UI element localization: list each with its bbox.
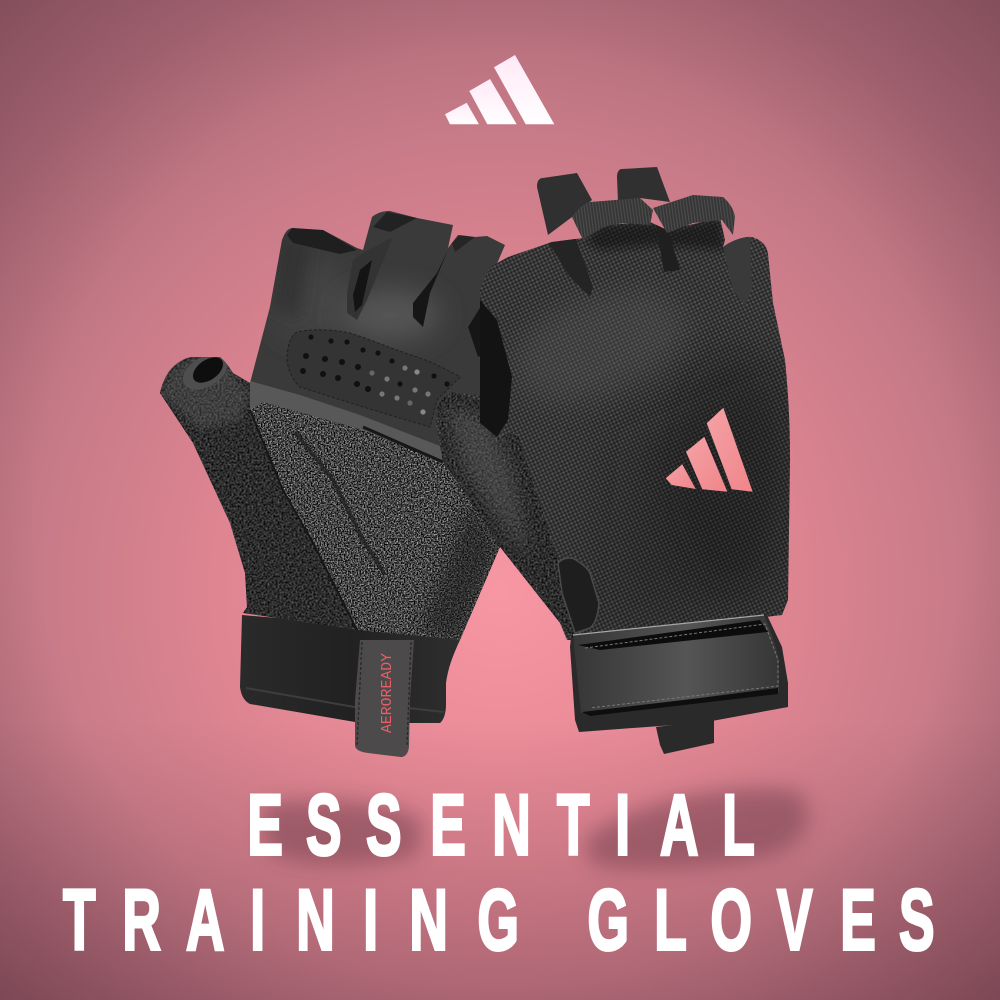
left glove: finger folds <box>347 260 379 320</box>
title line 2: TRAINING GLOVES <box>63 873 935 969</box>
left glove: felt thumb side <box>160 357 357 630</box>
title line 1: ESSENTIAL <box>247 778 755 874</box>
left glove: aeroready tab <box>355 640 414 757</box>
right glove: finger tabs <box>537 173 592 235</box>
right glove: thumb loop <box>558 558 599 633</box>
right glove: thumb web hollow <box>480 300 512 437</box>
left glove: finger openings <box>287 228 357 254</box>
right glove: back of hand view <box>436 167 790 754</box>
left glove: knit cuff <box>240 615 460 723</box>
title: essential training gloves <box>63 778 935 969</box>
right glove: cuff base <box>570 615 788 732</box>
left glove: mottled knit panel <box>250 402 500 640</box>
right glove: finger slit folds <box>548 238 593 297</box>
logo: top three bars <box>445 55 554 124</box>
right glove: velcro strap <box>573 615 779 713</box>
left glove: thumb opening <box>183 357 227 390</box>
logo: glove three bars <box>666 408 753 492</box>
left glove: suede palm shading <box>267 270 336 330</box>
aeroready label: AEROREADY <box>379 653 396 733</box>
right glove: bottom tab <box>656 720 714 754</box>
ground shadows <box>262 788 808 869</box>
right glove: mesh light and shadow <box>514 288 686 402</box>
right glove: felt thumb strip <box>437 392 575 640</box>
right glove: hand body <box>436 218 790 640</box>
left glove: wrist strip <box>250 381 450 465</box>
right glove: woven finger straps <box>572 198 653 240</box>
left glove: palm view <box>160 211 505 757</box>
left glove: hand body <box>160 211 505 640</box>
left glove: perforated pad <box>287 330 460 427</box>
left glove: pad holes <box>300 334 450 415</box>
